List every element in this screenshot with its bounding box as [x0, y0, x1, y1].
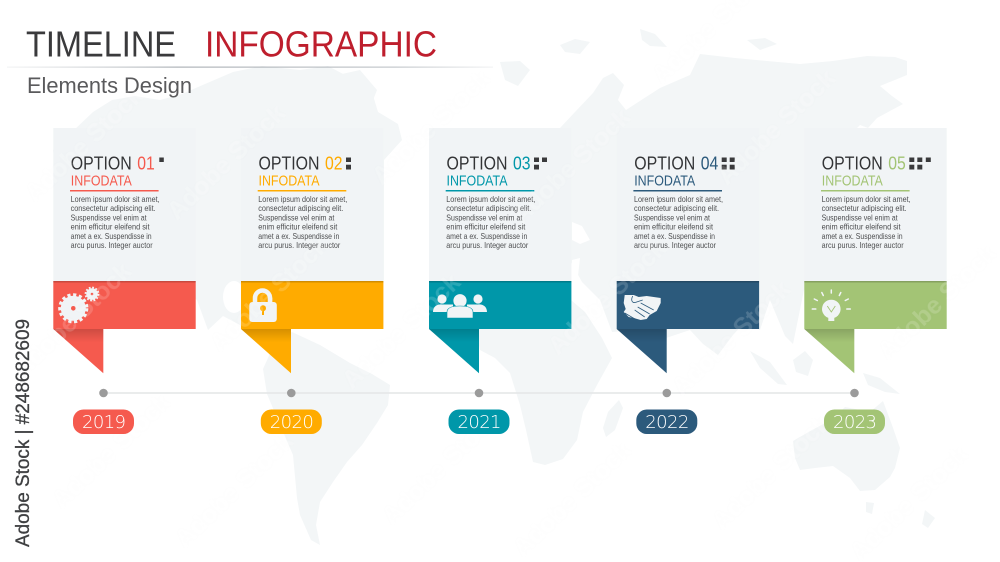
- infodata label 04: INFODATA: [634, 174, 695, 190]
- map: Eurasia: [560, 54, 907, 355]
- body text 03: [446, 194, 535, 250]
- map: South America: [263, 332, 390, 545]
- stock watermarks: Adobe Stock: [873, 239, 1000, 365]
- marker 2020: [261, 389, 322, 434]
- icon: padlock: [249, 290, 277, 322]
- body text 02: enim efficitur eleifend sit: [258, 222, 338, 232]
- body text 01: Suspendisse vel enim at: [71, 212, 147, 222]
- body text 04: Lorem ipsum dolor sit amet,: [634, 194, 723, 204]
- option heading 01: 01: [137, 153, 155, 174]
- option heading 02: 02: [325, 153, 342, 174]
- body text 03: consectetur adipiscing elit.: [446, 203, 531, 213]
- body text 04: Suspendisse vel enim at: [634, 212, 710, 222]
- body text 02: Suspendisse vel enim at: [258, 212, 335, 222]
- body text 05: Suspendisse vel enim at: [822, 212, 898, 222]
- stock watermarks: Adobe Stock: [508, 436, 637, 562]
- ribbon 01: [53, 281, 196, 373]
- stock watermarks: Adobe Stock: [170, 427, 299, 553]
- ribbon 03: [429, 281, 571, 373]
- stock watermarks: Adobe Stock: [543, 234, 672, 360]
- body text 05: [822, 194, 911, 250]
- stock watermarks: Adobe Stock: [337, 268, 466, 394]
- map: North America: [53, 66, 402, 345]
- panel: option 03: [429, 128, 571, 373]
- stock watermarks: Adobe Stock: [162, 99, 291, 225]
- stock watermarks: Adobe Stock: [377, 404, 506, 530]
- title: [26, 24, 437, 64]
- body text 01: Lorem ipsum dolor sit amet,: [71, 194, 160, 204]
- icon: light bulb: [812, 290, 850, 321]
- option heading 05: 05: [888, 153, 906, 174]
- option heading 04: 04: [701, 153, 718, 174]
- option heading 04: OPTION: [634, 153, 695, 174]
- body text 01: consectetur adipiscing elit.: [71, 203, 156, 213]
- map: Madagascar: [603, 400, 623, 437]
- map: islands: [333, 29, 935, 528]
- body text 03: Suspendisse vel enim at: [446, 212, 523, 222]
- marker 2019: 2019: [82, 412, 126, 433]
- body text 02: Lorem ipsum dolor sit amet,: [258, 194, 347, 204]
- step squares 05: [909, 158, 931, 170]
- subtitle: Elements Design: [27, 73, 192, 98]
- body text 05: arcu purus. Integer auctor: [822, 240, 904, 250]
- option heading 02: OPTION: [258, 153, 320, 174]
- marker 2023: [824, 389, 885, 434]
- map: inland seas: [223, 222, 612, 336]
- infodata label 05: INFODATA: [822, 174, 883, 190]
- body text 04: consectetur adipiscing elit.: [634, 203, 719, 213]
- stock watermarks: Adobe Stock: [47, 388, 176, 514]
- stock id side label: Adobe Stock | #248682609: [13, 319, 34, 547]
- body text 04: amet a ex. Suspendisse in: [634, 231, 715, 241]
- body text 05: enim efficitur eleifend sit: [822, 222, 901, 232]
- body text 03: Lorem ipsum dolor sit amet,: [446, 194, 535, 204]
- stock watermarks: Adobe Stock: [205, 231, 334, 357]
- body text 02: [258, 194, 347, 250]
- option heading 03: OPTION: [446, 153, 508, 174]
- infodata label 02: INFODATA: [258, 174, 320, 190]
- marker 2020: 2020: [270, 412, 314, 433]
- stock watermarks: Adobe Stock: [367, 64, 496, 190]
- marker 2022: [636, 389, 697, 434]
- stock watermarks: Adobe Stock: [667, 275, 796, 401]
- stock watermarks: Adobe Stock: [8, 257, 137, 383]
- body text 05: Lorem ipsum dolor sit amet,: [822, 194, 911, 204]
- body text 01: arcu purus. Integer auctor: [71, 240, 153, 250]
- body text 02: arcu purus. Integer auctor: [258, 240, 340, 250]
- infodata label 03: INFODATA: [446, 174, 508, 190]
- title: INFOGRAPHIC: [205, 24, 437, 64]
- panel: option 01: [53, 128, 196, 373]
- panel: option 05: [804, 128, 947, 373]
- ribbon 04: [617, 281, 759, 373]
- step squares 03: [534, 158, 547, 170]
- body text 05: amet a ex. Suspendisse in: [822, 231, 903, 241]
- stock watermarks: Adobe Stock: [707, 409, 836, 535]
- body text 03: arcu purus. Integer auctor: [446, 240, 528, 250]
- marker 2019: [73, 389, 134, 434]
- marker 2023: 2023: [833, 412, 877, 433]
- body text 01: [71, 194, 160, 250]
- body text 02: consectetur adipiscing elit.: [258, 203, 343, 213]
- option heading 05: OPTION: [822, 153, 883, 174]
- step squares 01: [159, 158, 164, 162]
- step squares 04: [722, 158, 735, 170]
- map: Australia: [793, 401, 900, 491]
- stock watermarks: Adobe Stock: [712, 64, 841, 190]
- map: Africa: [476, 300, 612, 465]
- title: TIMELINE: [26, 24, 176, 64]
- body text 04: enim efficitur eleifend sit: [634, 222, 714, 232]
- icon: handshake: [624, 295, 661, 320]
- panel: option 04: [617, 128, 759, 373]
- stock watermarks: Adobe Stock: [20, 81, 149, 207]
- infodata label 01: INFODATA: [71, 174, 132, 190]
- option heading 01: OPTION: [71, 153, 132, 174]
- icon: people: [433, 294, 487, 318]
- option heading 03: 03: [513, 153, 530, 174]
- ribbon 05: [804, 281, 947, 373]
- body text 04: arcu purus. Integer auctor: [634, 240, 716, 250]
- stock watermarks: Adobe Stock: [507, 103, 636, 229]
- body text 05: consectetur adipiscing elit.: [822, 203, 907, 213]
- marker 2022: 2022: [645, 412, 689, 433]
- body text 04: [634, 194, 723, 250]
- body text 01: amet a ex. Suspendisse in: [71, 231, 152, 241]
- marker 2021: 2021: [458, 412, 502, 433]
- body text 03: enim efficitur eleifend sit: [446, 222, 526, 232]
- icon: gears: [60, 288, 98, 322]
- ribbon 02: [241, 281, 383, 373]
- step squares 02: [346, 158, 351, 170]
- panel: option 02: [241, 128, 383, 373]
- body text 01: enim efficitur eleifend sit: [71, 222, 150, 232]
- timeline axis: [103, 392, 855, 394]
- body text 02: amet a ex. Suspendisse in: [258, 231, 339, 241]
- body text 03: amet a ex. Suspendisse in: [446, 231, 527, 241]
- marker 2021: [448, 389, 510, 434]
